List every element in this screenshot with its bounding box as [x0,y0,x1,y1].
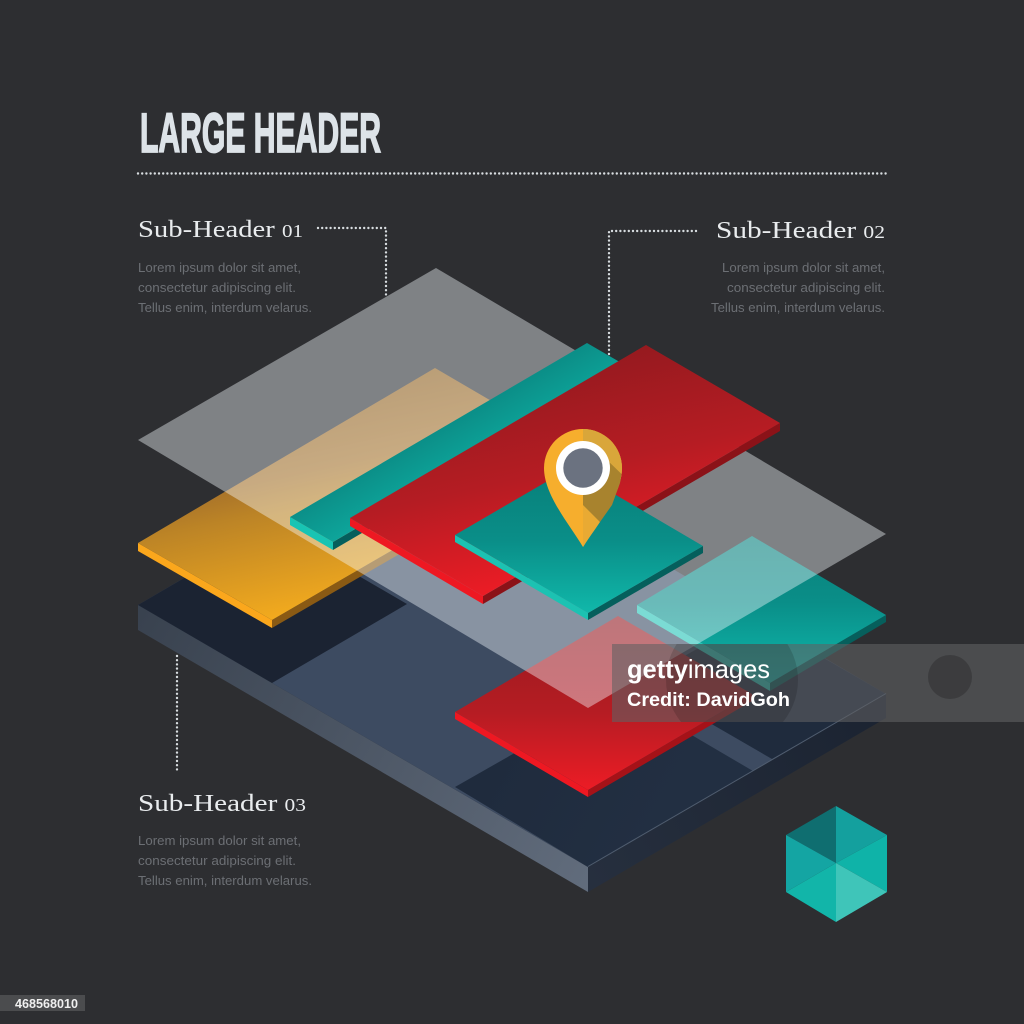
long teal slab [290,343,630,550]
image id tag [0,995,85,1011]
sub-header 01 block [138,216,312,315]
lower red slab [455,616,752,797]
icon: hexagon cube [786,806,887,922]
image id tag: 468568010 [15,997,78,1011]
connector 02 [609,231,696,356]
base slab [138,430,886,892]
sub-header 01 block: consectetur adipiscing elit. [138,281,296,295]
sub-header 03 block: Tellus enim, interdum velarus. [138,874,312,888]
sub-header 03 block [138,790,312,888]
upper red slab [350,345,780,604]
watermark band: gettyimages [627,654,770,684]
sub-header 02 block [711,217,885,315]
watermark band [612,644,1024,722]
header dotted rule [138,172,887,175]
sub-header 02 block: Lorem ipsum dolor sit amet, [722,261,885,275]
connector 03 [176,656,178,772]
sub-header 03 block: Lorem ipsum dolor sit amet, [138,834,301,848]
sub-header 03 block: Sub-Header 03 [138,790,306,817]
connector 01 [318,228,386,298]
watermark band: Credit: DavidGoh [627,690,790,711]
sub-header 02 block: Sub-Header 02 [716,217,885,244]
sub-header 01 block: Tellus enim, interdum velarus. [138,301,312,315]
sub-header 03 block: consectetur adipiscing elit. [138,854,296,868]
sub-header 02 block: Tellus enim, interdum velarus. [711,301,885,315]
aqua slab [637,536,886,691]
title: LARGE HEADER [140,101,381,164]
sub-header 02 block: consectetur adipiscing elit. [727,281,885,295]
small teal slab [455,468,703,620]
sub-header 01 block: Sub-Header 01 [138,216,303,243]
orange slab [138,368,570,628]
icon: map pin [544,429,622,547]
sub-header 01 block: Lorem ipsum dolor sit amet, [138,261,301,275]
translucent grey plate [138,268,886,708]
